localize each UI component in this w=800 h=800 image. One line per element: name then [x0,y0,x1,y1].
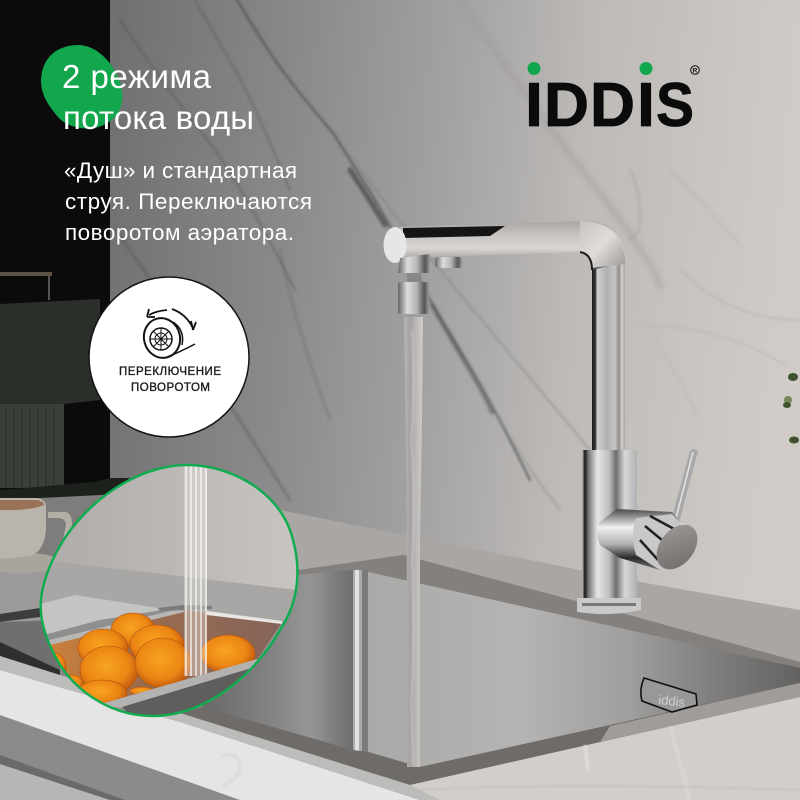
sink logo plate: iddis [658,692,686,710]
worktop and cup on the left [0,490,200,680]
handle cap [648,517,706,577]
inset tray interior [51,610,281,696]
inset worktop [70,564,294,622]
inset stone sink [40,595,160,636]
inset circle: shower mode [39,464,299,718]
icon: rotating aerator [139,309,196,362]
column [592,262,625,452]
inset water [184,460,207,676]
logo: IDDIS: I [525,71,543,140]
decorative plant leaves [783,373,799,444]
green blob behind heading [41,45,122,128]
body text: «Душ» и стандартная [64,158,297,183]
marble wall background [0,0,800,640]
badge: rotation switching [89,277,249,437]
badge label: ПОВОРОТОМ [131,382,210,394]
spout [400,221,625,270]
inset oranges [44,613,255,706]
logo: IDDIS [525,62,699,140]
body text: струя. Переключаются [65,189,312,214]
logo: IDDIS: D [544,71,589,140]
heading: 2 режима [62,58,212,95]
logo: IDDIS: D [590,71,635,140]
spout end [384,227,406,263]
marble front worktop [0,656,800,800]
heading [62,58,254,136]
badge label [119,366,221,394]
logo: IDDIS: I [637,71,655,140]
water stream [404,317,423,767]
aerator [398,254,430,273]
heading: потока воды [63,99,254,136]
worktop behind the sink [230,500,800,670]
body text: поворотом аэратора. [65,220,294,245]
inset tray front rim [97,659,257,708]
logo: IDDIS: R [693,68,698,74]
handle [597,509,692,570]
body text [64,158,312,245]
sink basin [180,555,800,785]
sink logo plate [641,678,697,712]
lever [671,449,698,523]
badge label: ПЕРЕКЛЮЧЕНИЕ [119,366,221,378]
base column [582,450,637,600]
faucet [384,221,706,767]
dark cabinet panel on the left [0,0,130,506]
logo: IDDIS: S [656,71,694,140]
